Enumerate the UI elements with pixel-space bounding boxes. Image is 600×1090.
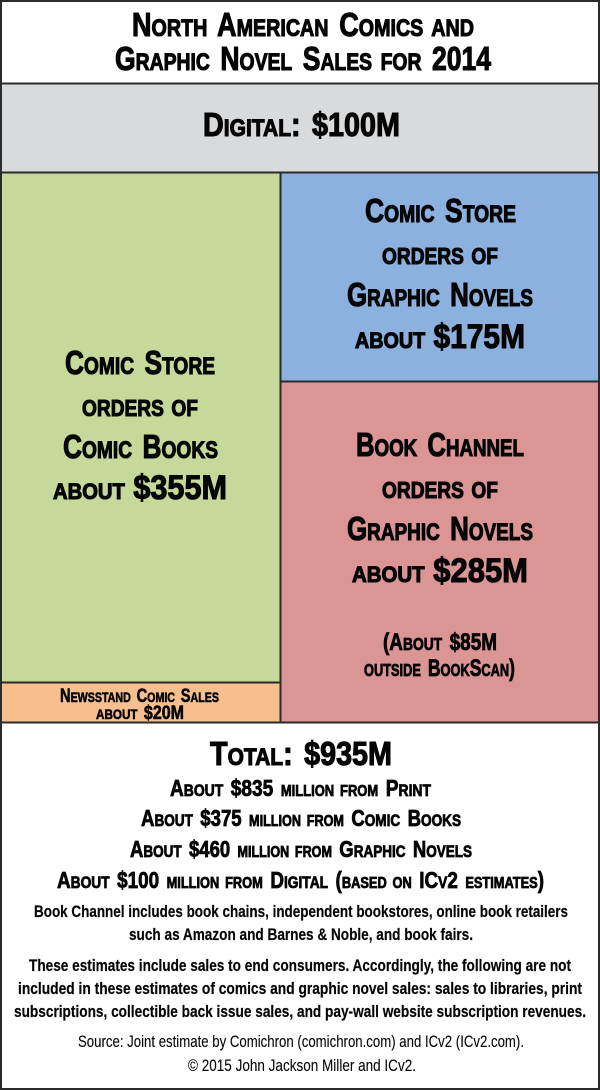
label: comic store: COMIC STORE [65,344,215,381]
note: book channel definition: such as Amazon and Barnes & Noble, and book fairs. [129,925,473,944]
label: orders of: ORDERS OF [382,243,498,269]
panel: title [1,1,599,83]
label: comic books: COMIC BOOKS [63,428,218,465]
label: newsstand comic sales: NEWSSTAND COMIC SALES [60,686,219,707]
panel: newsstand [1,683,280,724]
note: about 85M: (ABOUT $85M [383,629,497,656]
line: digital: ABOUT $100 MILLION FROM DIGITAL (BASED ON ICV2 ESTIMATES) [57,867,544,893]
panel: comic store graphic novels [281,173,599,381]
source and copyright: © 2015 John Jackson Miller and ICv2. [188,1056,416,1075]
value: 20M: ABOUT $20M [96,703,184,724]
value: 285M: ABOUT $285M [352,552,528,590]
line: graphic novels: ABOUT $460 MILLION FROM GRAPHIC NOVELS [130,836,472,862]
panel: book channel [281,382,599,722]
line: print: ABOUT $835 MILLION FROM PRINT [170,775,432,801]
heading: total: TOTAL: $935M [210,735,392,772]
note: estimate scope [14,956,586,1021]
label: graphic novels: GRAPHIC NOVELS [347,510,533,547]
panel: totals and notes [1,723,599,1089]
panel: comic store comic books [1,173,280,682]
label: digital sales: DIGITAL: $100M [203,106,400,143]
heading: title line 1: NORTH AMERICAN COMICS AND [132,6,474,43]
panel: digital [1,84,599,172]
line: comic books: ABOUT $375 MILLION FROM COMIC BOOKS [141,805,461,831]
value: 175M: ABOUT $175M [355,318,525,356]
value: 355M: ABOUT $355M [53,469,227,507]
label: orders of: ORDERS OF [382,477,498,503]
label: graphic novels: GRAPHIC NOVELS [347,276,533,313]
source and copyright [78,1032,524,1075]
note: book channel definition [34,902,568,944]
label: comic store: COMIC STORE [365,192,516,229]
label: book channel: BOOK CHANNEL [356,426,524,463]
note: outside bookscan: OUTSIDE BOOKSCAN) [364,655,515,682]
label: orders of: ORDERS OF [82,395,198,421]
heading: title line 2: GRAPHIC NOVEL SALES FOR 2014 [115,40,492,77]
